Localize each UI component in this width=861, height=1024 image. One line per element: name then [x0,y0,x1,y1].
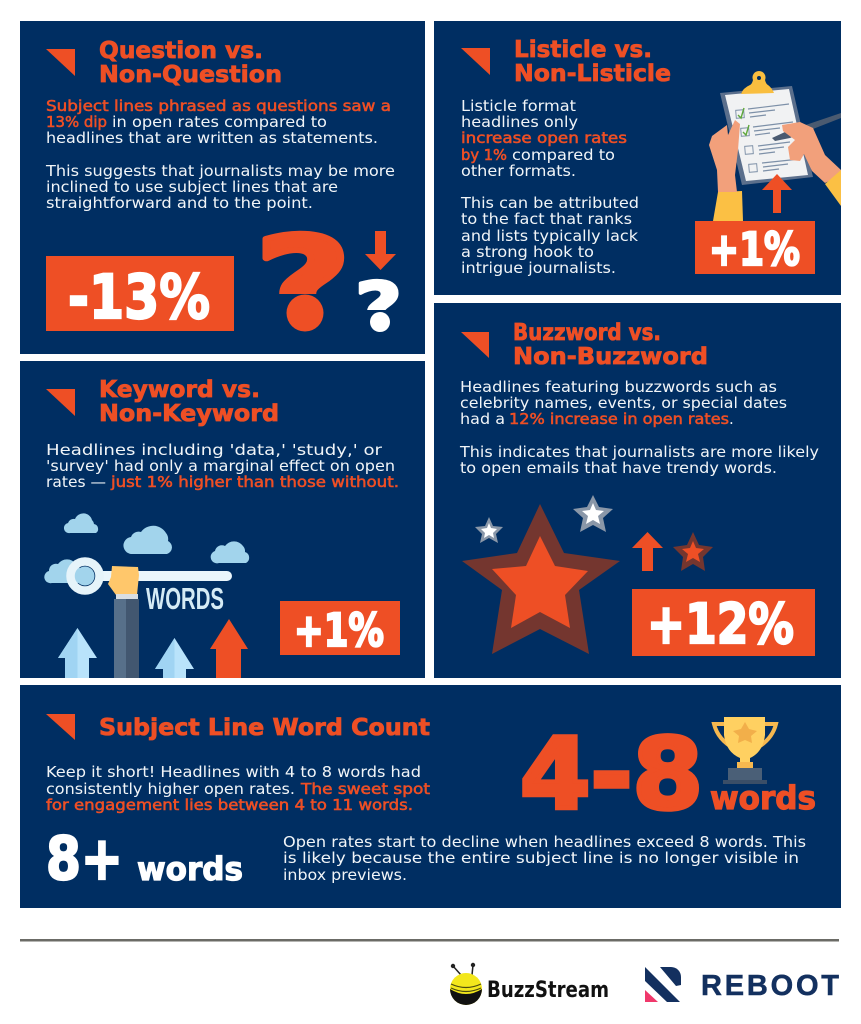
icon: corner triangle [461,48,490,75]
stat: plus 1 percent: +1% [294,604,384,657]
text block: question findings: inclined to use subject lines that are [46,178,338,196]
stat: 4-8 words: words [710,779,816,817]
text block: buzzword findings: 12% increase in open rates [509,410,729,428]
text block: open rate decline: is likely because the entire subject line is no longer visible in [283,849,799,867]
text block: listicle findings: and lists typically lack [461,227,638,245]
text block: listicle findings: increase open rates [461,129,627,147]
illustration: key with clouds and arrows [44,513,249,678]
text block: buzzword findings: to open emails that have trendy words. [460,459,777,477]
illustration: key with clouds and arrows: WORDS [146,581,224,616]
panel: subject line word count [20,685,841,908]
stat: 8+ words [46,824,243,894]
stat: 4-8 words: 4-8 [520,718,703,832]
heading: subject line word count: Subject Line Word Count [99,713,430,741]
text block: keep it short: Keep it short! Headlines with 4 to 8 words had [46,763,421,781]
icon: corner triangle [461,332,489,358]
text block: listicle findings [460,97,639,277]
logo: Reboot: REBOOT [701,970,839,1002]
heading: buzzword vs non-buzzword [513,318,708,370]
text block: question findings: This suggests that journalists may be more [45,162,395,180]
logo: BuzzStream [450,963,609,1005]
text block: open rate decline: Open rates start to decline when headlines exceed 8 words. This [283,833,806,851]
text block: keyword findings [46,441,399,491]
text block: open rate decline: inbox previews. [283,866,407,884]
text block: listicle findings: compared to [512,146,615,164]
text block: listicle findings: by 1% [461,146,507,164]
text block: question findings [45,97,395,212]
icon: corner triangle [46,389,75,416]
illustration: hands with clipboard [709,71,841,221]
heading: listicle vs non-listicle [514,35,671,87]
stat: 4-8 words [520,718,816,832]
panel: keyword vs non-keyword [20,361,425,678]
icon: corner triangle [46,49,75,76]
text block: listicle findings: other formats. [461,162,576,180]
icon: corner triangle [46,714,75,740]
heading: keyword vs non-keyword: Non-Keyword [99,399,279,427]
text block: question findings: Subject lines phrased as questions saw a [46,97,391,115]
icon: large question mark: ? [255,210,351,358]
heading: buzzword vs non-buzzword: Non-Buzzword [513,342,708,370]
text block: keep it short: consistently higher open rates. [46,780,295,798]
heading: keyword vs non-keyword: Keyword vs. [99,375,260,403]
heading: buzzword vs non-buzzword: Buzzword vs. [513,318,661,346]
text block: listicle findings: Listicle format [461,97,576,115]
text block: buzzword findings: celebrity names, events, or special dates [460,394,787,412]
heading: question vs non-question: Question vs. [99,36,263,64]
heading: question vs non-question [99,36,282,88]
text block: keep it short: for engagement lies between 4 to 11 words. [46,796,413,814]
icon: small question mark [358,278,399,332]
text block: listicle findings: This can be attributed [460,194,639,212]
text block: buzzword findings: . [729,410,734,428]
heading: listicle vs non-listicle: Listicle vs. [514,35,652,63]
stat: 8+ words: words [137,850,243,888]
text block: keyword findings: 'survey' had only a marginal effect on open [46,457,395,475]
stat: 8+ words: 8+ [46,824,123,894]
logo: Reboot [645,967,839,1002]
text block: listicle findings: headlines only [461,113,578,131]
panel: question vs non-question [20,21,425,358]
text block: buzzword findings [459,378,819,477]
text block: open rate decline [283,833,806,884]
text block: question findings: 13% dip [46,113,107,131]
text block: buzzword findings: This indicates that journalists are more likely [459,443,819,461]
icon: large question mark [262,230,344,332]
text block: buzzword findings: Headlines featuring buzzwords such as [460,378,777,396]
text block: keyword findings: rates — [46,473,106,491]
logo: BuzzStream: BuzzStream [487,978,609,1003]
panel: buzzword vs non-buzzword [434,303,841,678]
panel: listicle vs non-listicle [434,21,841,295]
text block: keep it short [46,763,430,814]
text block: keep it short: The sweet spot [300,780,430,798]
text block: question findings: in open rates compared to [112,113,327,131]
heading: keyword vs non-keyword [99,375,279,427]
text block: listicle findings: a strong hook to [461,243,594,261]
stat: minus 13 percent: -13% [68,262,210,333]
text block: buzzword findings: had a [460,410,505,428]
icon: trophy [714,717,776,784]
text block: listicle findings: intrigue journalists. [461,259,616,277]
text block: keyword findings: Headlines including 'data,' 'study,' or [46,441,383,459]
text block: keyword findings: just 1% higher than those without. [110,473,399,491]
text block: question findings: straightforward and to the point. [46,194,313,212]
text block: listicle findings: to the fact that ranks [461,210,632,228]
illustration: stars [462,495,713,654]
text block: question findings: headlines that are written as statements. [46,129,378,147]
heading: listicle vs non-listicle: Non-Listicle [514,59,671,87]
icon: up arrow [632,532,663,571]
stat: plus 12 percent: +12% [647,592,794,656]
icon: small question mark: ? [355,268,402,346]
heading: question vs non-question: Non-Question [99,60,282,88]
footer divider [20,939,839,942]
stat: plus 1 percent: +1% [709,223,800,276]
icon: down arrow [365,231,396,270]
